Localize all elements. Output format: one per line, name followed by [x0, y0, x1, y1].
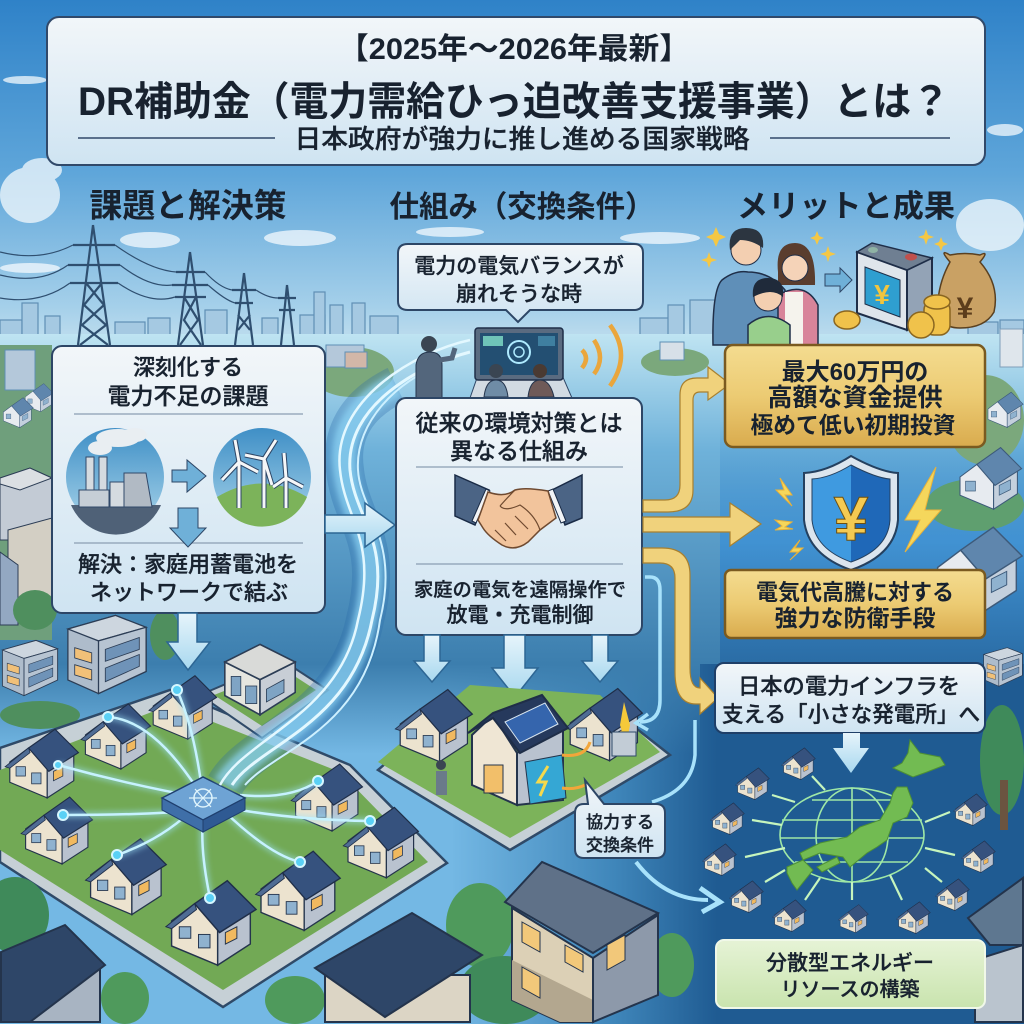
left strip: hillside with houses	[0, 345, 57, 640]
Japan map	[787, 740, 945, 890]
illustration: globe and Japan with houses	[702, 740, 995, 934]
father	[713, 228, 790, 345]
home cluster: middle	[378, 685, 670, 850]
mother	[778, 243, 818, 345]
icons: lightning bolts	[775, 467, 941, 560]
heading: mechanism: 仕組み（交換条件）	[390, 191, 654, 224]
icon: signal waves	[582, 325, 621, 386]
callout: balance: 崩れそうな時	[456, 283, 582, 306]
main house with solar panels	[468, 695, 568, 805]
arrow: left panel to neighbourhood	[167, 613, 210, 670]
issue text	[108, 355, 268, 409]
panel: energy price defence: 電気代高騰に対する	[756, 580, 954, 605]
mechanism heading: 従来の環境対策とは	[416, 410, 622, 436]
label: exchange terms: 交換条件	[586, 836, 654, 855]
background: ground and water	[0, 334, 1024, 1024]
child	[748, 278, 790, 345]
label: exchange terms: 協力する	[586, 813, 654, 832]
icon: shield with yen: ¥	[834, 485, 869, 554]
right-hand houses	[926, 329, 1024, 830]
heading: benefits: メリットと成果	[737, 189, 955, 224]
icon: coins	[834, 295, 950, 338]
mechanism body: 放電・充電制御	[446, 604, 594, 627]
arrow: to shield	[643, 503, 761, 546]
panel: mechanism	[396, 398, 642, 635]
callout: balance: 電力の電気バランスが	[414, 255, 624, 278]
small neighbourhood: island with smart network	[0, 644, 447, 1007]
panel: distributed energy: リソースの構築	[780, 978, 920, 1001]
mechanism body	[414, 579, 626, 627]
small far island	[310, 342, 709, 397]
power towers	[0, 225, 296, 345]
panel: energy price defence	[725, 570, 985, 638]
panel: funding: 高額な資金提供	[768, 384, 942, 412]
arrow: down	[170, 508, 206, 547]
icon: spark	[620, 702, 630, 745]
panel: energy price defence: 強力な防衛手段	[774, 605, 936, 631]
panel: funding: 最大60万円の	[782, 359, 928, 386]
solution text: ネットワークで結ぶ	[90, 580, 288, 605]
mechanism heading	[416, 410, 622, 464]
panel: distributed energy: 分散型エネルギー	[766, 952, 934, 975]
icon: shield with yen	[804, 456, 898, 570]
heading: issues and solutions: 課題と解決策	[90, 187, 286, 224]
left neighbourhood buildings	[0, 610, 180, 729]
mechanism body: 家庭の電気を遠隔操作で	[414, 579, 626, 601]
person	[436, 760, 447, 795]
houses around the hub	[5, 644, 418, 965]
callout: balance	[398, 244, 643, 322]
icon: power plant	[66, 428, 164, 535]
label: exchange terms	[575, 780, 665, 858]
subtitle: 日本政府が強力に推し進める国家戦略	[294, 124, 750, 154]
sparkles	[701, 227, 948, 268]
mechanism heading: 異なる仕組み	[450, 438, 588, 464]
arrow: to Japan map	[833, 733, 869, 773]
issue text: 電力不足の課題	[108, 383, 268, 409]
energy stream	[220, 340, 470, 785]
arrow: right	[172, 460, 206, 492]
panel: small power plant: 日本の電力インフラを	[738, 674, 960, 699]
small houses	[702, 748, 995, 934]
arrow: to power infrastructure panel	[643, 548, 718, 714]
icon: battery with yen: ¥	[874, 279, 890, 310]
title line 2: DR補助金（電力需給ひっ迫改善支援事業）とは？	[78, 80, 950, 124]
panel: small power plant: 支える「小さな発電所」へ	[722, 702, 980, 727]
panel: issues	[52, 346, 325, 613]
small stream arrows	[636, 577, 720, 912]
arrow: to funding panel	[643, 367, 730, 512]
title panel	[47, 17, 985, 165]
network hub with glowing lines	[54, 685, 375, 903]
outward arrows	[745, 776, 955, 900]
background: skyline	[0, 292, 1024, 368]
panel: funding	[725, 345, 985, 447]
issue text: 深刻化する	[133, 355, 243, 380]
icon: control room	[416, 328, 572, 398]
arrow: left panel to middle panel	[325, 503, 395, 547]
globe wireframe	[780, 788, 924, 882]
icon: handshake	[455, 475, 582, 548]
bottom foreground buildings	[0, 862, 1023, 1024]
panel: distributed energy	[716, 940, 985, 1008]
icon: money bag	[938, 253, 995, 328]
panel: funding: 極めて低い初期投資	[750, 412, 956, 438]
solution text: 解決：家庭用蓄電池を	[78, 552, 298, 577]
arrows: panel to homes	[414, 635, 618, 697]
icon: money bag: ¥	[957, 292, 974, 325]
gold arrows	[643, 367, 761, 714]
icon: wind turbines	[213, 428, 311, 527]
icon: battery with yen	[857, 243, 932, 330]
illustration: family	[701, 227, 948, 345]
panel: small power plant	[715, 663, 985, 733]
solution text	[78, 552, 298, 605]
title line 1: 【2025年～2026年最新】	[338, 33, 690, 66]
arrow: family to battery	[825, 268, 852, 292]
